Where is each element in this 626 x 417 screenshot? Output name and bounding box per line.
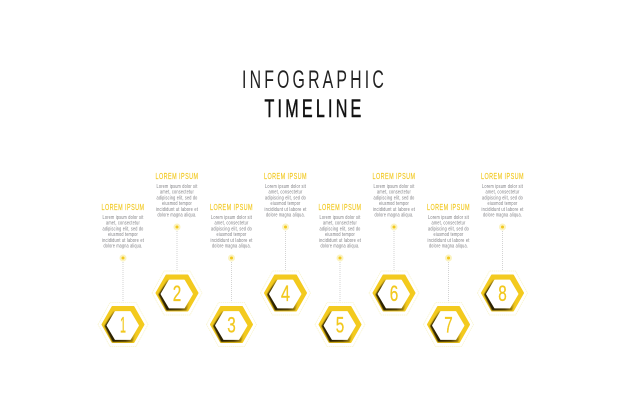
step 1 hexagon: 1 bbox=[120, 312, 126, 338]
step 5 text: Lorem ipsum dolor sit bbox=[320, 215, 361, 221]
step 2 text: incididunt ut labore et bbox=[156, 207, 198, 213]
step 6 text: dolore magna aliqua. bbox=[374, 212, 414, 218]
step 4 text: amet, consectetur bbox=[268, 190, 302, 196]
step 5 connector bbox=[336, 254, 344, 303]
step 2 heading: LOREM IPSUM bbox=[156, 171, 198, 181]
step 1 bbox=[98, 202, 148, 346]
step 8 text: adipiscing elit, sed do bbox=[482, 195, 523, 201]
step 2 hexagon: 2 bbox=[173, 281, 181, 306]
step 2 bbox=[152, 171, 202, 315]
step 2 connector bbox=[174, 224, 180, 271]
step 8 connector bbox=[499, 224, 506, 271]
step 4 hexagon bbox=[260, 271, 310, 315]
step 7 text: dolore magna aliqua. bbox=[429, 244, 468, 250]
step 1 text bbox=[102, 215, 144, 250]
step 2 hexagon bbox=[152, 271, 202, 315]
step 1 text: incididunt ut labore et bbox=[102, 238, 144, 244]
step 8 text bbox=[482, 184, 524, 218]
step 1 text: dolore magna aliqua. bbox=[104, 244, 142, 250]
step 4 text: Lorem ipsum dolor sit bbox=[265, 184, 306, 190]
step 3 text bbox=[210, 215, 253, 250]
step 8 hexagon bbox=[478, 271, 528, 315]
step 1 hexagon bbox=[98, 302, 148, 346]
step 1 text: amet, consectetur bbox=[106, 221, 140, 227]
step 5 text: dolore magna aliqua. bbox=[320, 244, 360, 250]
step 6 text bbox=[373, 184, 415, 218]
step 1 heading: LOREM IPSUM bbox=[102, 202, 144, 212]
step 2 text: dolore magna aliqua. bbox=[158, 212, 196, 218]
step 4 text: incididunt ut labore et bbox=[264, 207, 307, 213]
step 2 text: adipiscing elit, sed do bbox=[156, 195, 198, 201]
step 7 text: adipiscing elit, sed do bbox=[428, 226, 469, 232]
step 5 text: amet, consectetur bbox=[323, 221, 357, 227]
step 7 hexagon bbox=[424, 302, 474, 346]
step 5 text bbox=[319, 215, 361, 250]
step 5 hexagon bbox=[315, 302, 365, 346]
step 3 connector bbox=[228, 254, 235, 303]
step 1 connector bbox=[120, 254, 126, 303]
step 4 text: eiusmod tempor bbox=[270, 201, 300, 207]
step 8 text: eiusmod tempor bbox=[488, 201, 518, 207]
step 6 heading: LOREM IPSUM bbox=[372, 171, 416, 181]
step 7 text: incididunt ut labore et bbox=[428, 238, 470, 244]
title: INFOGRAPHIC bbox=[242, 66, 387, 94]
step 6 text: eiusmod tempor bbox=[379, 201, 409, 207]
step 2 text: Lorem ipsum dolor sit bbox=[156, 184, 198, 190]
step 3 hexagon: 3 bbox=[227, 312, 236, 338]
step 5 bbox=[315, 202, 365, 346]
step 4 hexagon: 4 bbox=[281, 281, 290, 306]
step 8 hexagon: 8 bbox=[498, 281, 507, 306]
title bbox=[242, 66, 387, 123]
step 3 bbox=[206, 202, 256, 346]
step 4 text: adipiscing elit, sed do bbox=[265, 195, 306, 201]
step 3 text: amet, consectetur bbox=[214, 221, 248, 227]
step 6 text: incididunt ut labore et bbox=[373, 207, 415, 213]
step 3 text: adipiscing elit, sed do bbox=[211, 226, 252, 232]
step 2 text: amet, consectetur bbox=[160, 190, 194, 196]
step 1 text: Lorem ipsum dolor sit bbox=[102, 215, 144, 221]
step 4 text: dolore magna aliqua. bbox=[266, 212, 305, 218]
step 3 hexagon bbox=[206, 302, 256, 346]
step 4 text bbox=[264, 184, 307, 218]
step 5 text: incididunt ut labore et bbox=[319, 238, 361, 244]
step 8 text: dolore magna aliqua. bbox=[483, 212, 522, 218]
step 8 bbox=[478, 171, 528, 315]
step 6 connector bbox=[390, 224, 398, 271]
step 5 hexagon: 5 bbox=[336, 312, 344, 338]
step 4 heading: LOREM IPSUM bbox=[264, 171, 307, 181]
step 3 text: dolore magna aliqua. bbox=[212, 244, 251, 250]
step 7 hexagon: 7 bbox=[444, 312, 453, 338]
step 8 text: incididunt ut labore et bbox=[482, 207, 524, 213]
step 7 heading: LOREM IPSUM bbox=[427, 202, 470, 212]
step 3 text: Lorem ipsum dolor sit bbox=[211, 215, 252, 221]
step 8 heading: LOREM IPSUM bbox=[481, 171, 524, 181]
step 5 heading: LOREM IPSUM bbox=[318, 202, 362, 212]
step 6 text: amet, consectetur bbox=[377, 190, 411, 196]
step 6 text: Lorem ipsum dolor sit bbox=[374, 184, 415, 190]
step 6 bbox=[369, 171, 419, 315]
step 2 text: eiusmod tempor bbox=[162, 201, 192, 207]
step 4 bbox=[260, 171, 310, 315]
step 2 text bbox=[156, 184, 198, 218]
step 8 text: Lorem ipsum dolor sit bbox=[482, 184, 523, 190]
title: TIMELINE bbox=[264, 95, 364, 123]
step 7 text: amet, consectetur bbox=[432, 221, 466, 227]
step 7 text bbox=[428, 215, 470, 250]
step 8 text: amet, consectetur bbox=[486, 190, 520, 196]
step 1 text: eiusmod tempor bbox=[108, 232, 138, 238]
step 4 connector bbox=[282, 224, 289, 271]
step 3 text: eiusmod tempor bbox=[216, 232, 246, 238]
step 7 connector bbox=[445, 254, 452, 303]
step 5 text: adipiscing elit, sed do bbox=[320, 226, 360, 232]
step 6 hexagon: 6 bbox=[390, 281, 398, 306]
step 3 text: incididunt ut labore et bbox=[210, 238, 253, 244]
step 7 text: eiusmod tempor bbox=[434, 232, 464, 238]
step 3 heading: LOREM IPSUM bbox=[210, 202, 253, 212]
step 5 text: eiusmod tempor bbox=[325, 232, 355, 238]
step 1 text: adipiscing elit, sed do bbox=[102, 226, 144, 232]
step 6 hexagon bbox=[369, 271, 419, 315]
step 7 bbox=[424, 202, 474, 346]
step 6 text: adipiscing elit, sed do bbox=[374, 195, 414, 201]
step 7 text: Lorem ipsum dolor sit bbox=[428, 215, 469, 221]
